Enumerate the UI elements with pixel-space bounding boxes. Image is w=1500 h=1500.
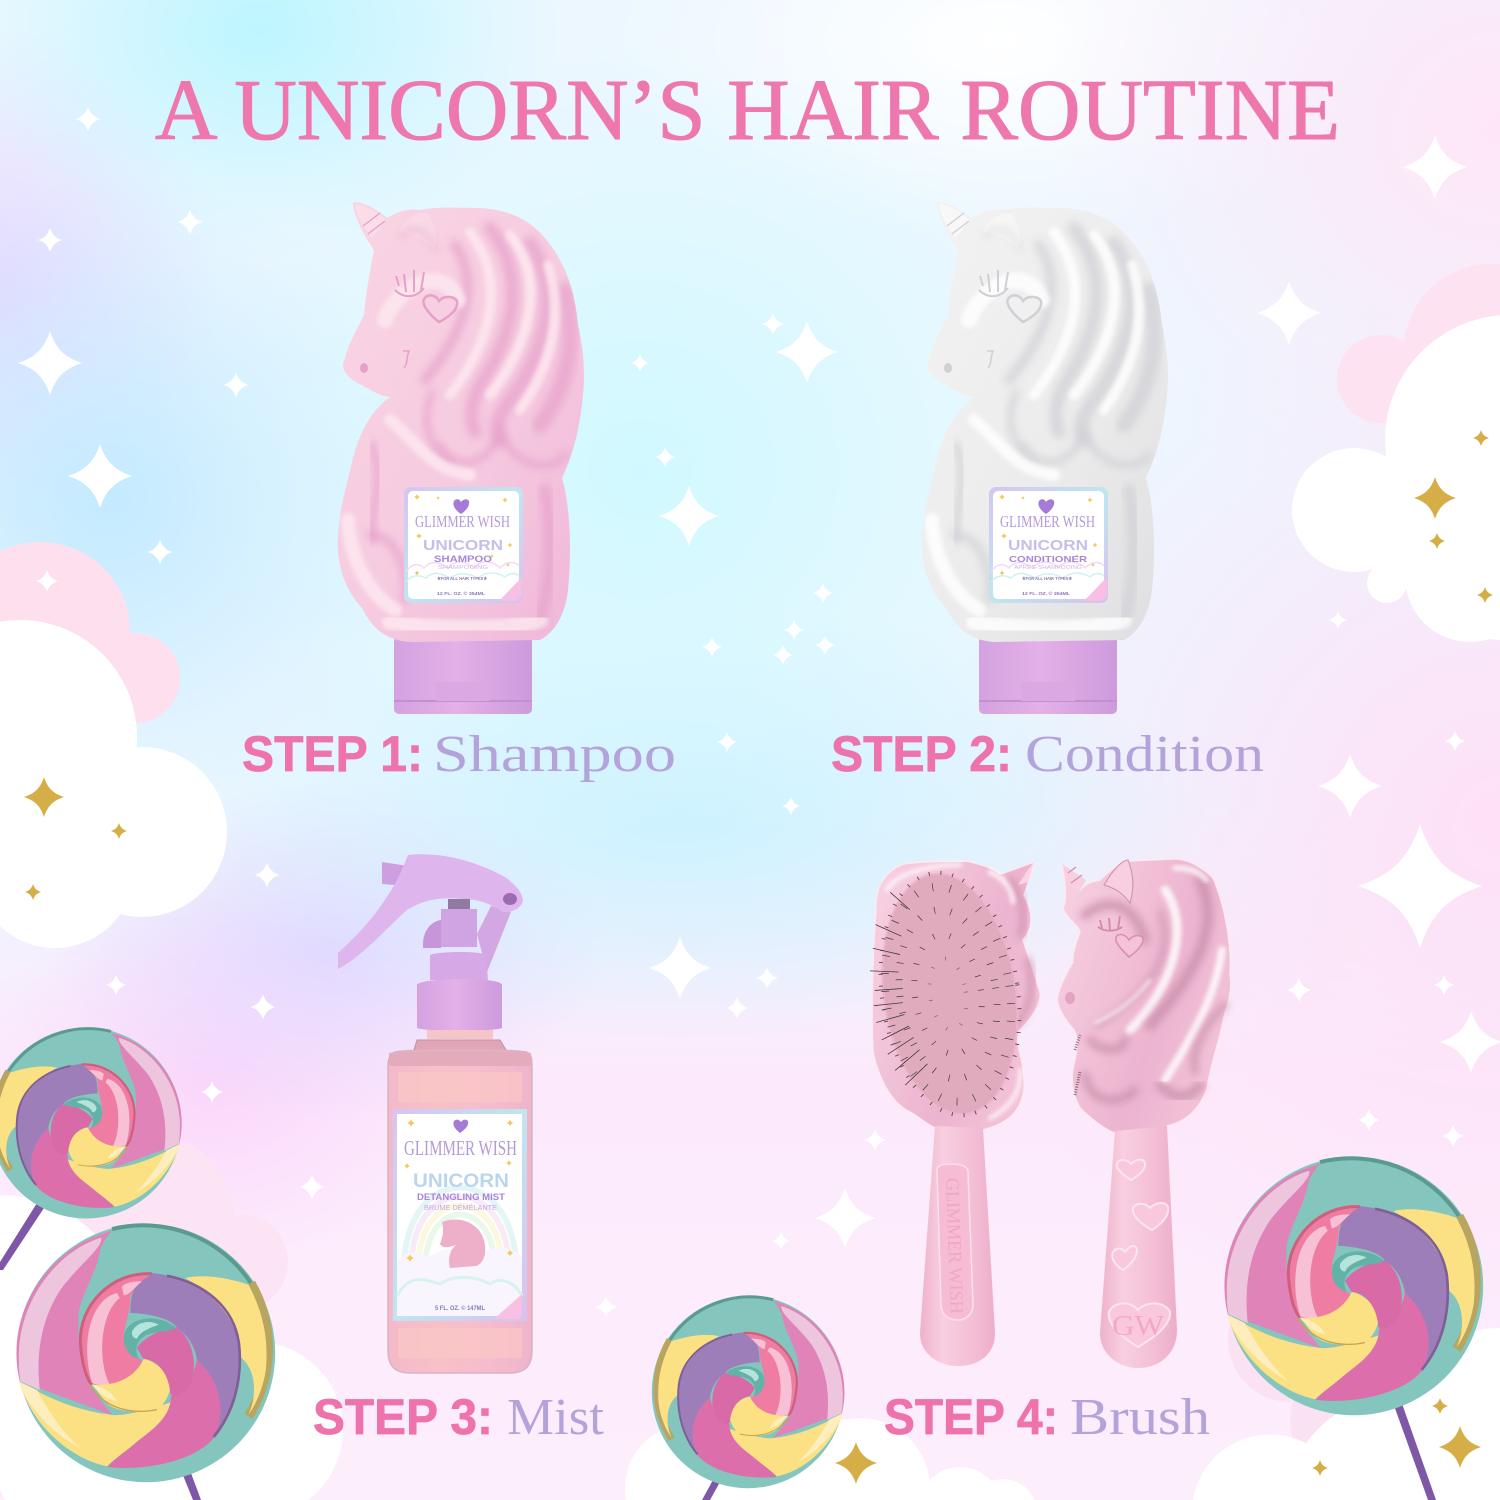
title: A UNICORN’S HAIR ROUTINE — [155, 61, 1340, 158]
mist bottle body — [388, 1030, 532, 1373]
label: shampoo: SHAMPOO — [434, 554, 492, 564]
lollipop: large bottom right — [1224, 1157, 1483, 1500]
mist label: DETANGLING MIST — [417, 1192, 506, 1202]
brush head highlights — [887, 862, 1034, 1366]
back brush outline — [1057, 859, 1231, 1368]
step 3 caption — [313, 1389, 605, 1446]
clouds: right pink and white — [1292, 264, 1500, 642]
label: shampoo — [404, 487, 523, 603]
label: conditioner: ★FOR ALL HAIR TYPES★ — [1022, 576, 1073, 582]
back brush mane details — [1062, 860, 1225, 1368]
label: shampoo: SHAMPOOING — [438, 565, 488, 571]
bottle body: conditioner — [914, 195, 1174, 645]
product: detangling mist spray bottle — [338, 854, 532, 1373]
label: shampoo: 12 FL. OZ. © 354ML — [437, 590, 485, 597]
lollipop: large bottom left — [16, 1224, 275, 1500]
brush bristle pad — [857, 864, 1034, 1126]
brush handle logo — [937, 1164, 973, 1320]
gold sparkles — [24, 430, 1493, 1476]
bottle cap: conditioner — [979, 636, 1117, 714]
back brush hearts and monogram: GW — [1112, 1311, 1165, 1342]
step 3 caption: STEP 3: — [313, 1389, 493, 1445]
label: conditioner — [989, 487, 1108, 603]
step 1 caption: Shampoo — [433, 726, 676, 783]
step 4 caption — [884, 1389, 1210, 1446]
step 1 caption: STEP 1: — [242, 726, 423, 782]
lollipop: top left — [0, 1028, 182, 1270]
label: conditioner: APRÈS-SHAMPOOING — [1014, 564, 1082, 571]
clouds: left pink and white — [0, 542, 227, 948]
clouds: bottom middle and right — [625, 1278, 1500, 1500]
step 3 caption: Mist — [507, 1389, 605, 1446]
label: conditioner: UNICORN — [1008, 537, 1088, 554]
spray trigger head — [338, 854, 523, 972]
spray neck and collar — [417, 899, 502, 1031]
label: shampoo: ★FOR ALL HAIR TYPES★ — [437, 576, 488, 582]
bottle cap: shampoo — [394, 636, 532, 714]
label: shampoo: UNICORN — [423, 537, 503, 554]
product: brush, bristle side — [857, 861, 1040, 1366]
mist label: BRUME DÉMÉLANTE — [424, 1203, 497, 1212]
mist label — [393, 1109, 527, 1321]
label: shampoo: GLIMMER WISH — [415, 512, 510, 531]
step 2 caption — [831, 726, 1264, 783]
mist label: 5 FL. OZ. © 147ML — [435, 1305, 485, 1312]
back brush hearts and monogram — [1109, 1160, 1170, 1347]
product: brush, unicorn back side — [1057, 859, 1231, 1368]
mist label: UNICORN — [413, 1171, 509, 1192]
label: conditioner: 12 FL. OZ. © 354ML — [1022, 590, 1070, 597]
product: unicorn shampoo bottle — [330, 195, 590, 714]
brush handle logo: GLIMMER WISH — [941, 1177, 967, 1314]
label: conditioner: CONDITIONER — [1009, 554, 1087, 564]
clouds: bottom left — [0, 1135, 343, 1500]
label: conditioner: GLIMMER WISH — [1000, 512, 1095, 531]
bottle body: shampoo — [330, 195, 590, 645]
step 2 caption: Condition — [1025, 726, 1264, 783]
lollipop: bottom centre — [652, 1296, 844, 1500]
brush outline — [872, 861, 1040, 1366]
product: unicorn conditioner bottle — [914, 195, 1174, 714]
step 1 caption — [242, 726, 676, 783]
gold sparkle by centre lollipop — [835, 1442, 877, 1484]
step 4 caption: STEP 4: — [884, 1389, 1058, 1445]
step 4 caption: Brush — [1070, 1389, 1210, 1446]
white sparkles — [18, 106, 1500, 1318]
step 2 caption: STEP 2: — [831, 726, 1012, 782]
mist label: GLIMMER WISH — [404, 1136, 517, 1160]
